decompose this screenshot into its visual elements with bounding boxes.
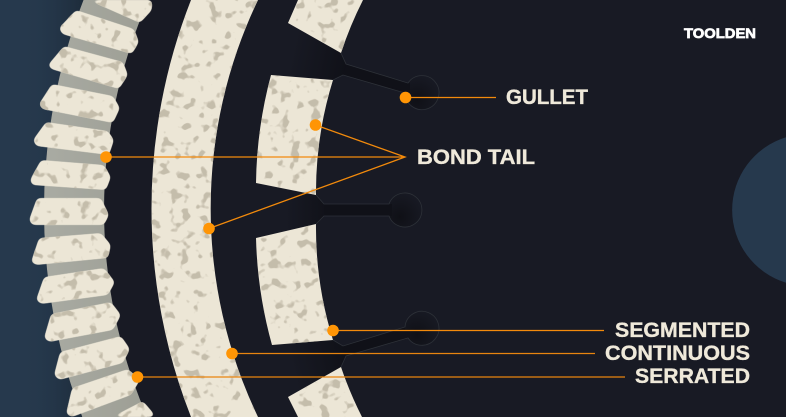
serrated teeth xyxy=(0,0,154,417)
logo: TOOLDEN xyxy=(684,25,756,41)
rim steel band xyxy=(44,0,148,417)
gullet: lower xyxy=(272,311,439,397)
continuous rim speckle xyxy=(152,0,258,417)
callout: continuous: CONTINUOUS xyxy=(605,342,750,365)
callout: gullet: GULLET xyxy=(506,86,588,109)
panel: gullets xyxy=(256,23,439,397)
arbor hole xyxy=(732,137,786,283)
segmented rim speckle xyxy=(257,0,354,417)
callout: continuous xyxy=(226,342,750,365)
callout: segmented: SEGMENTED xyxy=(615,319,750,342)
gullet: middle xyxy=(256,183,422,238)
callout: bond tail xyxy=(100,119,535,234)
callout: serrated xyxy=(132,365,750,388)
panel: serrated rim xyxy=(0,0,154,417)
gullet: upper xyxy=(271,23,439,110)
callout: serrated: SERRATED xyxy=(635,365,750,388)
callout: bond tail: BOND TAIL xyxy=(417,146,535,169)
callout: segmented xyxy=(327,319,750,342)
callout: gullet xyxy=(400,86,588,109)
panel: segmented rim xyxy=(256,0,363,417)
panel: continuous rim xyxy=(152,0,258,417)
